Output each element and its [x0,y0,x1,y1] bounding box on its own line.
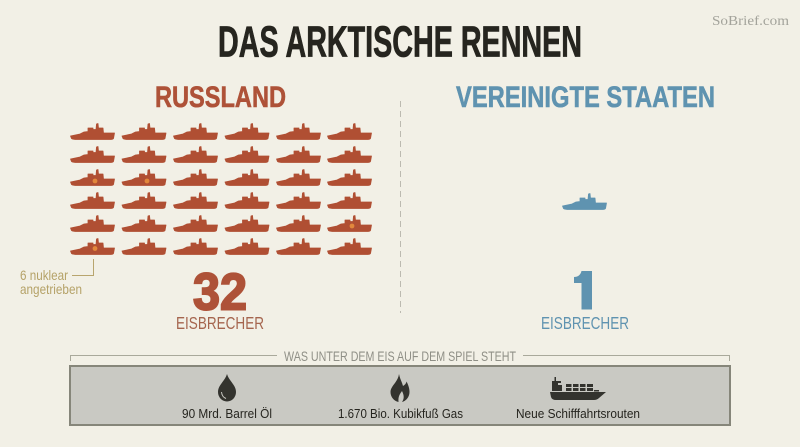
icon: gas flame [390,374,410,402]
icon grid: 36 Russian ships [70,124,372,254]
number: 32 icebreakers [176,264,264,333]
central dashed divider [400,101,402,313]
panel: resources [70,366,730,425]
title: DAS ARKTISCHE RENNEN [218,18,582,66]
number: 1 icebreaker: 1 [569,264,604,322]
watermark: SoBrief.com [712,13,790,28]
label: gas: 1.670 Bio. Kubikfuß Gas [338,406,463,421]
nuclear markers on ships [93,179,354,251]
icon: container ship [550,377,606,400]
number: 1 icebreaker: EISBRECHER [541,313,629,333]
number: 32 icebreakers: EISBRECHER [176,313,264,333]
callout: 6 nuklear angetrieben: angetrieben [20,281,82,297]
label: routes: Neue Schifffahrtsrouten [516,406,640,421]
section heading: stakes [70,349,730,364]
icon: oil drop [218,374,236,402]
heading: Russland: RUSSLAND [155,81,286,114]
number: 32 icebreakers: 32 [193,264,247,322]
heading: Vereinigte Staaten: VEREINIGTE STAATEN [456,81,715,114]
callout: 6 nuklear angetrieben: 6 nuklear [20,267,68,283]
icon: single US ship [562,194,606,210]
label: oil: 90 Mrd. Barrel Öl [182,406,272,421]
number: 1 icebreaker [542,271,628,329]
callout: 6 nuklear angetrieben [20,259,94,297]
section heading: stakes: WAS UNTER DEM EIS AUF DEM SPIEL STEHT [284,349,516,364]
